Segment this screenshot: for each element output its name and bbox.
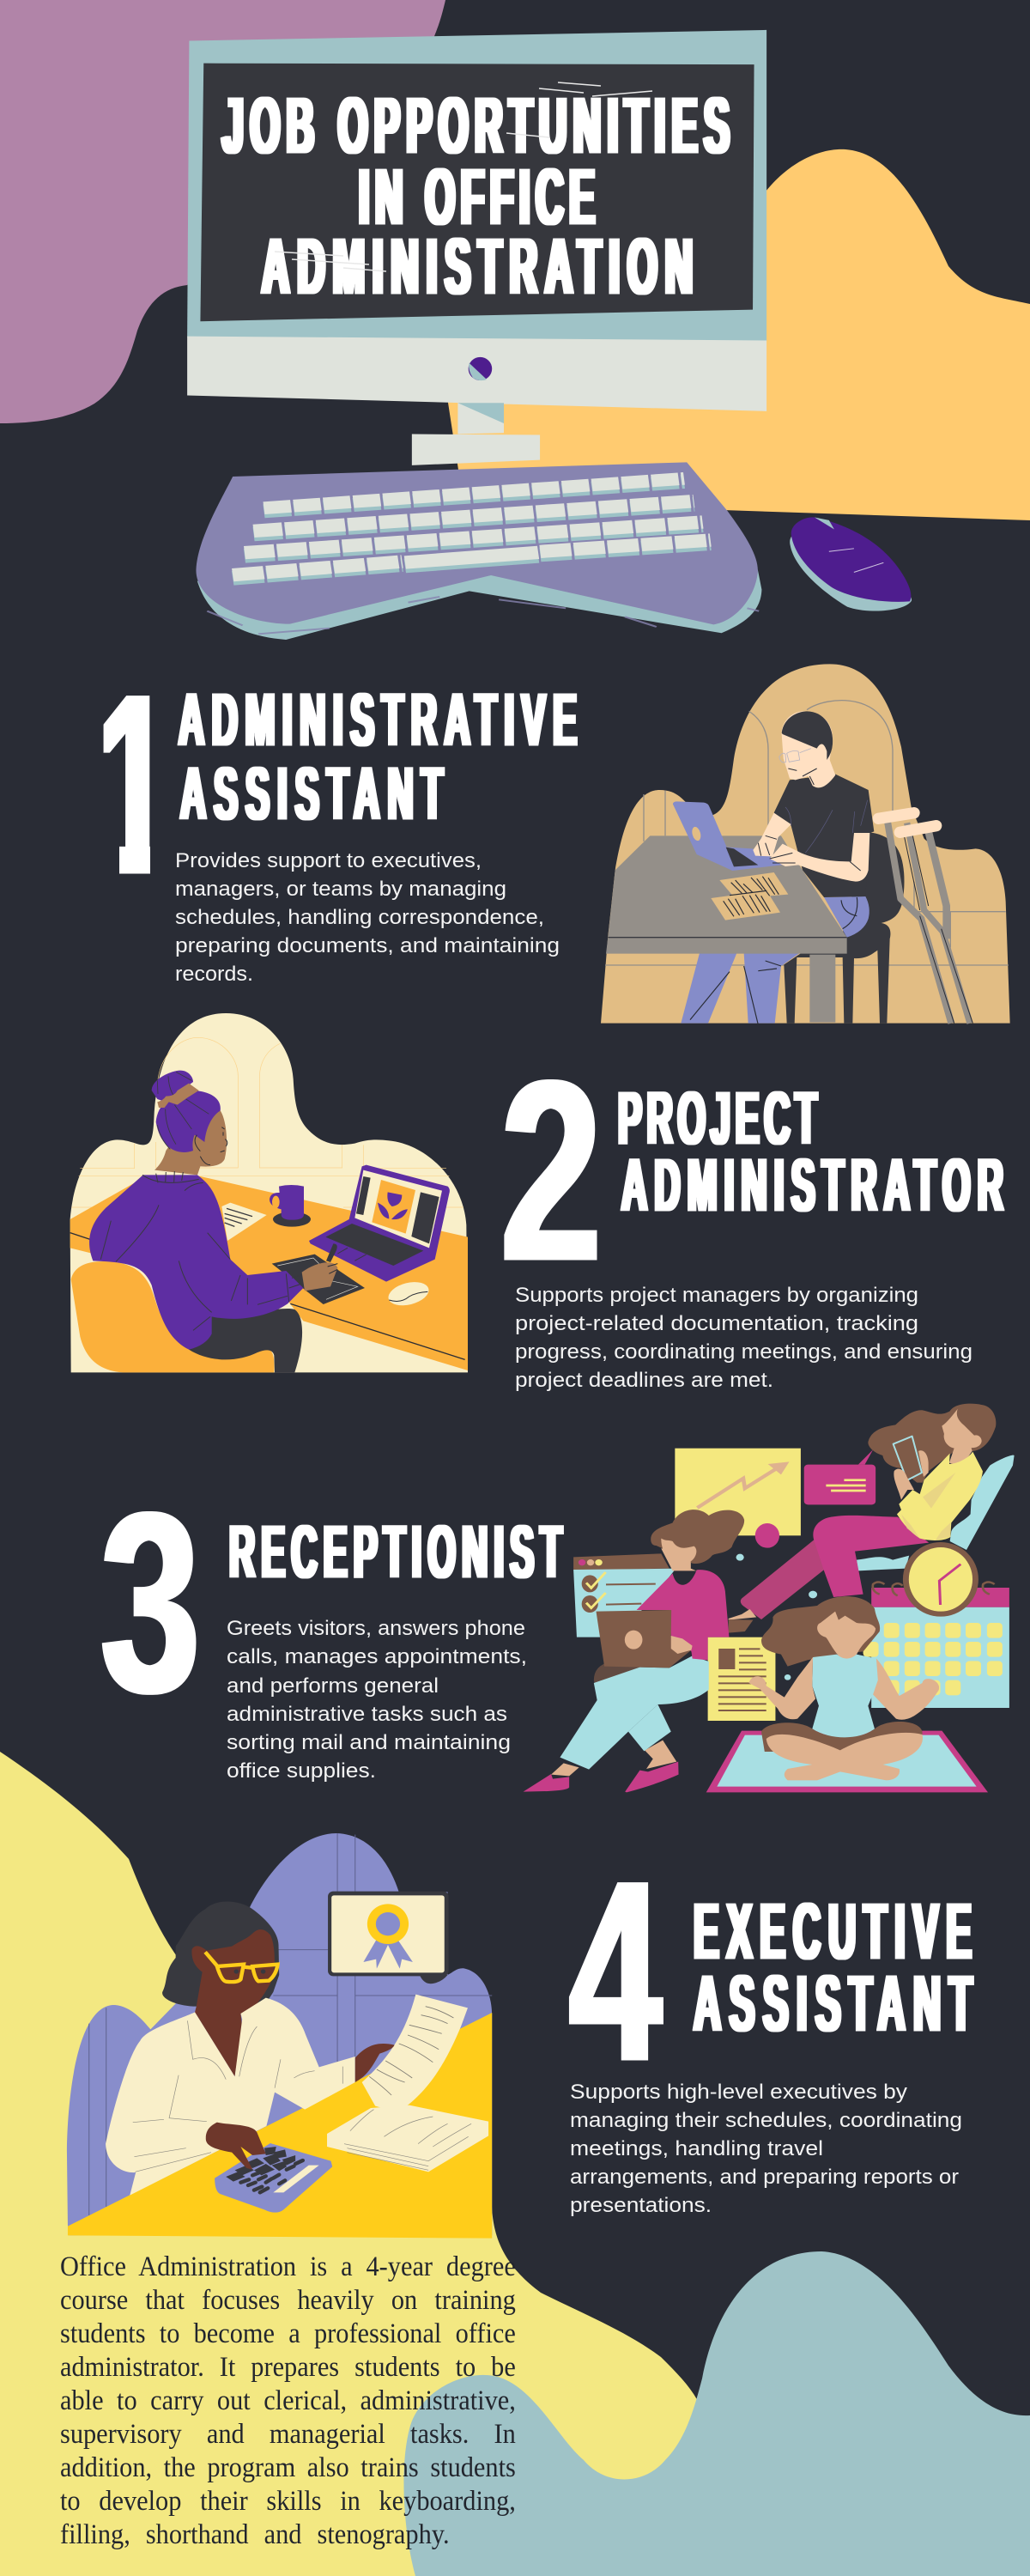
description paragraph: supervisory and managerial tasks. In: [60, 2419, 516, 2450]
description paragraph: Office Administration is a 4-year degree: [60, 2251, 516, 2282]
speech bubble: [804, 1449, 876, 1504]
meditating woman: [748, 1596, 939, 1780]
illustration 4: woman with calculator: [67, 1833, 492, 2239]
section 1 heading: ASSISTANT: [180, 752, 443, 835]
section 1 text: managers, or teams by managing: [175, 878, 506, 901]
calculator: [215, 2143, 332, 2213]
section 2 number: 2: [500, 1026, 602, 1315]
book: [327, 2105, 488, 2172]
illustration 2: woman at design laptop: [70, 1013, 468, 1372]
section 3 text: office supplies.: [227, 1759, 376, 1783]
section 4 text: [570, 2081, 962, 2217]
illustration 1: man at laptop: [601, 664, 1010, 1024]
monitor button: [469, 357, 492, 380]
document: [708, 1637, 775, 1721]
head: [782, 711, 835, 787]
monitor screen: [200, 64, 754, 321]
raised hand: [918, 1450, 929, 1477]
checklist window: [573, 1553, 676, 1637]
calendar: [863, 1582, 1009, 1708]
section 2 text: project deadlines are met.: [515, 1369, 773, 1392]
monitor bezel: [187, 30, 766, 341]
background blob: mauve: [0, 0, 445, 423]
chair: [784, 832, 904, 1024]
section 1 number: 1: [98, 640, 172, 928]
hand holding paper: [355, 2044, 395, 2082]
crutches: [888, 822, 972, 1024]
reclining woman with phone: [868, 1404, 1015, 1550]
section 4 text: presentations.: [570, 2194, 712, 2217]
phone: [894, 1437, 922, 1480]
forearm: [894, 1469, 914, 1500]
section 1 heading: [179, 678, 577, 835]
section 3 text: sorting mail and maintaining: [227, 1731, 511, 1754]
hair: [162, 1902, 279, 2007]
keyboard body: [196, 462, 758, 624]
mug: [270, 1185, 311, 1227]
section 4 text: managing their schedules, coordinating: [570, 2109, 962, 2132]
chair back: [950, 1455, 1015, 1550]
section 2 heading: [618, 1077, 1003, 1227]
section 2 text: progress, coordinating meetings, and ensuring: [515, 1340, 972, 1364]
section 2 text: project-related documentation, tracking: [515, 1312, 918, 1335]
background blob: orange: [448, 149, 1030, 520]
description paragraph: course that focuses heavily on training: [60, 2285, 516, 2316]
section 1 text: preparing documents, and maintaining: [175, 934, 560, 957]
papers: [711, 872, 788, 920]
keyboard: [196, 462, 761, 640]
background blob: teal: [403, 2251, 1030, 2576]
section 4 heading: EXECUTIVE: [694, 1887, 972, 1976]
monitor: [187, 30, 912, 611]
title: ADMINISTRATION: [262, 222, 693, 311]
title: [222, 82, 730, 311]
description paragraph: able to carry out clerical, administrative,: [60, 2385, 516, 2416]
tablet: [272, 1255, 365, 1304]
face: [191, 1929, 275, 2076]
title: IN OFFICE: [359, 153, 595, 241]
headwrap: [152, 1071, 221, 1152]
sweater: [89, 1175, 303, 1350]
small dots: [736, 1554, 817, 1680]
hand on calculator: [206, 2123, 266, 2170]
reclining woman trousers: [729, 1516, 929, 1633]
key rows: [233, 478, 711, 578]
trousers: [189, 1308, 302, 1372]
hair: [782, 711, 833, 760]
blouse: [106, 1998, 355, 2196]
long hair: [868, 1404, 996, 1483]
desk: [606, 835, 847, 954]
section 1 heading: ADMINISTRATIVE: [179, 678, 577, 762]
laptop: [309, 1165, 450, 1282]
backdrop: [70, 1013, 468, 1372]
title: JOB OPPORTUNITIES: [222, 82, 730, 170]
section 2 heading: PROJECT: [618, 1077, 817, 1160]
legs: [681, 896, 869, 1024]
section 1 text: records.: [175, 963, 253, 986]
neck and face: [154, 1110, 227, 1175]
section 4 text: arrangements, and preparing reports or: [570, 2166, 959, 2189]
section 4 text: Supports high-level executives by: [570, 2081, 907, 2104]
section 2 text: [515, 1284, 972, 1392]
face: [942, 1409, 982, 1464]
section 4 heading: ASSISTANT: [694, 1959, 972, 2048]
mouse: [386, 1279, 431, 1309]
yoga mat: [706, 1731, 988, 1792]
torso: [774, 775, 874, 897]
section 1 text: schedules, handling correspondence,: [175, 906, 544, 929]
chair: [71, 1261, 274, 1372]
description paragraph: [60, 2251, 516, 2550]
section 3 text: and performs general: [227, 1674, 439, 1698]
description paragraph: to develop their skills in keyboarding,: [60, 2486, 516, 2517]
section 3 text: administrative tasks such as: [227, 1703, 507, 1726]
illustration 3: team with calendar: [524, 1404, 1015, 1792]
section 3 heading: RECEPTIONIST: [229, 1510, 562, 1594]
desk: [70, 1176, 468, 1370]
backdrop: [601, 664, 1010, 1024]
section 3 text: [227, 1617, 527, 1783]
section 4 heading: [694, 1887, 972, 2048]
section 1 text: [175, 849, 560, 986]
section 4 number: 4: [569, 1826, 663, 2115]
section 2 text: Supports project managers by organizing: [515, 1284, 918, 1307]
section 4 text: meetings, handling travel: [570, 2137, 823, 2160]
description paragraph: administrator. It prepares students to be: [60, 2352, 516, 2383]
glasses: [205, 1952, 277, 1982]
monitor chin: [187, 337, 766, 411]
desk: [68, 2013, 492, 2239]
woman with laptop: [524, 1510, 744, 1792]
description paragraph: filling, shorthand and stenography.: [60, 2519, 450, 2550]
description paragraph: students to become a professional office: [60, 2318, 516, 2349]
section 3 number: 3: [100, 1458, 200, 1747]
paper: [221, 1203, 267, 1241]
section 3 text: Greets visitors, answers phone: [227, 1617, 525, 1640]
hand and pen: [302, 1262, 337, 1291]
section 2 heading: ADMINISTRATOR: [621, 1144, 1003, 1227]
section 3 text: calls, manages appointments,: [227, 1645, 527, 1668]
chart card: [675, 1449, 801, 1535]
keyboard shadow: [197, 569, 761, 640]
paper: [362, 1995, 468, 2112]
monitor stand: [412, 403, 540, 465]
mouse: [790, 517, 912, 611]
arms: [753, 813, 791, 856]
section 1 text: Provides support to executives,: [175, 849, 482, 872]
background blob: yellow: [0, 1752, 700, 2576]
description paragraph: addition, the program also trains students: [60, 2452, 516, 2483]
magenta dot: [755, 1523, 779, 1548]
crutch handles: [878, 813, 936, 832]
laptop: [673, 801, 787, 871]
blouse: [897, 1452, 983, 1540]
clock: [903, 1542, 978, 1617]
certificate: [328, 1892, 449, 1984]
backdrop: [67, 1833, 492, 2235]
